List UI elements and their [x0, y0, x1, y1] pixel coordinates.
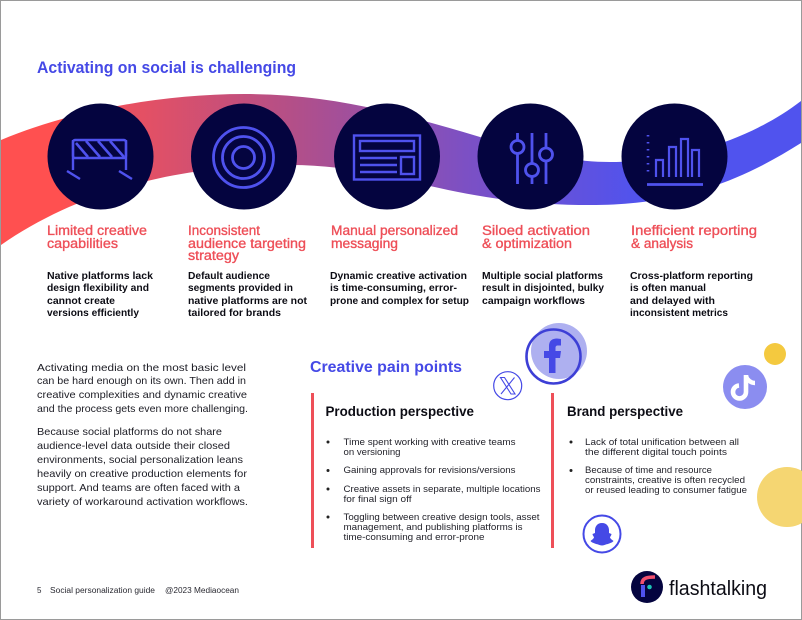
- footer: 5: [37, 586, 42, 595]
- column 5: inefficient reporting and analysis: is often manual: [630, 282, 706, 294]
- decorative yellow dot small: [764, 343, 786, 365]
- column 2: inconsistent audience targeting: audience targeting: [188, 236, 306, 251]
- panel: production perspective: for final sign off: [344, 494, 412, 505]
- column 2: inconsistent audience targeting: segments provided in: [188, 282, 293, 294]
- intro paragraphs: [37, 362, 248, 508]
- column 4: siloed activation and optimization: result in disjointed, bulky: [482, 282, 604, 294]
- panel: production perspective: [311, 393, 541, 548]
- column 2: inconsistent audience targeting: tailored for brands: [188, 307, 281, 319]
- column 3: manual personalized messaging: [330, 223, 469, 307]
- column 5: inefficient reporting and analysis: Cross-platform reporting: [630, 270, 753, 282]
- column 2: inconsistent audience targeting: Inconsistent: [188, 223, 260, 238]
- column 1: limited creative capabilities: cannot create: [47, 295, 115, 307]
- panel: brand perspective: Because of time and resource: [585, 465, 712, 476]
- column 4: siloed activation and optimization: Multiple social platforms: [482, 270, 603, 282]
- column 5: inefficient reporting and analysis: inconsistent metrics: [630, 307, 728, 319]
- column 5: inefficient reporting and analysis: & analysis: [631, 236, 693, 251]
- column 5: inefficient reporting and analysis: [630, 223, 757, 319]
- column 1: limited creative capabilities: [47, 223, 153, 319]
- column 4: siloed activation and optimization: [482, 223, 604, 307]
- panel: production perspective: Gaining approvals for revisions/versions: [344, 465, 516, 476]
- panel: brand perspective: [551, 393, 747, 548]
- panel: production perspective: Production perspective: [326, 404, 474, 419]
- column 1: limited creative capabilities: capabilities: [47, 236, 118, 251]
- panel: production perspective: Creative assets in separate, multiple locations: [344, 484, 541, 495]
- panel: brand perspective: the different digital touch points: [585, 447, 727, 458]
- column 5: inefficient reporting and analysis: and delayed with: [630, 295, 715, 307]
- column 3: manual personalized messaging: prone and complex for setup: [330, 295, 469, 307]
- decorative yellow circle large: [757, 467, 802, 527]
- title: Activating on social is challenging: [37, 58, 296, 77]
- column 2: inconsistent audience targeting: strategy: [188, 248, 239, 263]
- footer: Social personalization guide: [50, 586, 156, 595]
- intro paragraphs: creative complexities and dynamic creative: [37, 389, 247, 401]
- icon: sliders: [478, 104, 584, 210]
- panel: production perspective: Time spent working with creative teams: [344, 437, 516, 448]
- column 2: inconsistent audience targeting: native platforms are not: [188, 295, 307, 307]
- column 1: limited creative capabilities: design flexibility and: [47, 282, 149, 294]
- column 3: manual personalized messaging: Manual personalized: [331, 223, 458, 238]
- icon: web layout: [334, 104, 440, 210]
- column 1: limited creative capabilities: versions efficiently: [47, 307, 139, 319]
- column 3: manual personalized messaging: is time-consuming, error-: [330, 282, 458, 294]
- panel: production perspective: on versioning: [344, 447, 400, 458]
- intro paragraphs: variety of workaround activation workflows.: [37, 496, 248, 508]
- icon: X: [494, 372, 522, 400]
- panel: production perspective: time-consuming and error-prone: [344, 532, 484, 543]
- icon: target: [191, 104, 297, 210]
- column 2: inconsistent audience targeting: [188, 223, 307, 319]
- intro paragraphs: Because social platforms do not share: [37, 426, 222, 438]
- intro paragraphs: can be hard enough on its own. Then add in: [37, 375, 246, 387]
- panel: production perspective: management, and publishing platforms is: [344, 522, 523, 533]
- logo: flashtalking: [631, 571, 767, 603]
- footer: [37, 586, 239, 595]
- column 5: inefficient reporting and analysis: Inefficient reporting: [631, 223, 757, 238]
- gradient ribbon: [1, 94, 801, 245]
- logo: flashtalking: flashtalking: [669, 578, 767, 600]
- intro paragraphs: support. And teams are often faced with a: [37, 482, 240, 494]
- column 4: siloed activation and optimization: & optimization: [482, 236, 572, 251]
- heading: creative pain points: Creative pain points: [310, 359, 462, 376]
- panel: production perspective: Toggling between creative design tools, asset: [344, 512, 540, 523]
- column 1: limited creative capabilities: Native platforms lack: [47, 270, 153, 282]
- panel: brand perspective: Lack of total unification between all: [585, 437, 739, 448]
- footer: @2023 Mediaocean: [165, 586, 239, 595]
- column 4: siloed activation and optimization: Siloed activation: [482, 223, 590, 238]
- icon: barrier: [48, 104, 154, 210]
- panel: brand perspective: Brand perspective: [567, 404, 683, 419]
- column 1: limited creative capabilities: Limited creative: [47, 223, 147, 238]
- icon: tiktok: [723, 365, 767, 409]
- icon: bar chart: [622, 104, 728, 210]
- icon: snapchat: [584, 516, 620, 552]
- intro paragraphs: audience-level data outside their closed: [37, 440, 230, 452]
- panel: brand perspective: or reused leading to consumer fatigue: [585, 485, 747, 496]
- intro paragraphs: heavily on creative production elements for: [37, 468, 248, 480]
- column 3: manual personalized messaging: Dynamic creative activation: [330, 270, 467, 282]
- intro paragraphs: Activating media on the most basic level: [37, 362, 246, 374]
- panel: brand perspective: constraints, creative is often recycled: [585, 475, 745, 486]
- column 4: siloed activation and optimization: campaign workflows: [482, 295, 585, 307]
- column 3: manual personalized messaging: messaging: [331, 236, 398, 251]
- intro paragraphs: and the process gets even more challenging.: [37, 403, 248, 415]
- intro paragraphs: environments, social personalization leans: [37, 454, 243, 466]
- icon: facebook: [526, 323, 587, 384]
- column 2: inconsistent audience targeting: Default audience: [188, 270, 270, 282]
